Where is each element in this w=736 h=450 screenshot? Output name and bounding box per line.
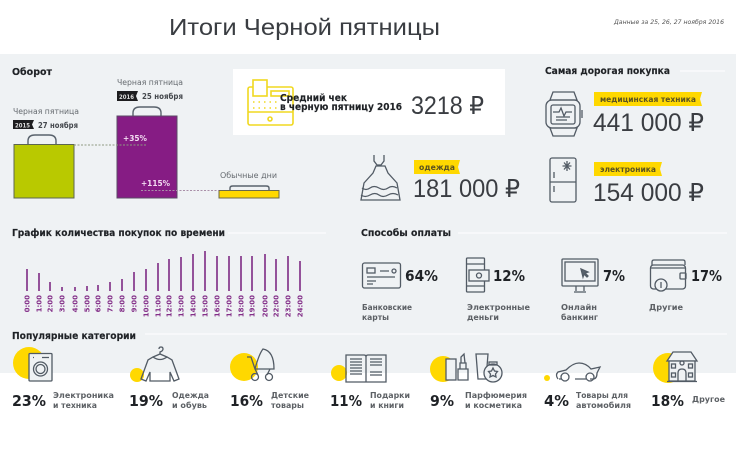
panel: most expensive purchase: 181 000 ₽ xyxy=(413,175,520,203)
icon: shirt on hanger xyxy=(141,347,179,381)
hour labels: 16:00 xyxy=(214,295,222,317)
panel: payment methods: 64% xyxy=(405,267,438,285)
hour labels: 2:00 xyxy=(46,295,54,312)
icon: stroller xyxy=(247,349,274,380)
tag: electronics xyxy=(594,162,662,176)
icon: smartwatch xyxy=(546,92,582,136)
panel: most expensive purchase xyxy=(361,66,704,207)
bars xyxy=(27,251,300,291)
category: perfume and cosmetics: Парфюмерия xyxy=(465,391,527,400)
panel: payment methods: Онлайн xyxy=(561,303,597,312)
hour labels: 4:00 xyxy=(72,295,80,312)
category: clothes and shoes: и обувь xyxy=(172,400,207,410)
category: children's goods: 16% xyxy=(230,392,263,410)
panel: payment methods: 17% xyxy=(691,267,722,285)
bag: 2015: 2015 xyxy=(15,122,30,130)
panel: turnover xyxy=(12,67,279,198)
icon: online banking monitor xyxy=(562,259,598,292)
category: children's goods xyxy=(230,349,310,410)
panel: payment methods: Другие xyxy=(649,303,684,312)
hour labels: 19:00 xyxy=(248,295,256,317)
tag: medical equipment xyxy=(594,92,702,106)
panel: payment methods: 7% xyxy=(603,267,625,285)
icon: cosmetics xyxy=(446,354,502,382)
hour labels: 10:00 xyxy=(142,295,150,317)
icon: e-money xyxy=(466,258,489,292)
category: gifts and books: 11% xyxy=(330,392,362,410)
bag: 2016 xyxy=(117,78,183,198)
hour labels: 23:00 xyxy=(284,295,292,317)
icon: cash register xyxy=(248,80,293,125)
heading: turnover: Оборот xyxy=(12,67,52,78)
hour labels: 9:00 xyxy=(130,295,138,312)
category: perfume and cosmetics: и косметика xyxy=(465,401,522,410)
bag: 2016: 2016 xyxy=(119,93,134,101)
category: car goods xyxy=(544,363,631,410)
category: gifts and books: Подарки xyxy=(370,391,410,400)
panel: average check: Средний чек xyxy=(280,93,348,104)
panel: payment methods: карты xyxy=(362,313,389,322)
panel: average check: 3218 ₽ xyxy=(411,92,484,120)
icon: bank card xyxy=(362,263,400,288)
hour labels xyxy=(24,295,304,317)
hour labels: 17:00 xyxy=(226,295,234,317)
hour labels: 6:00 xyxy=(94,295,102,312)
heading: chart: График количества покупок по времени xyxy=(12,228,225,239)
category: electronics and appliances: 23% xyxy=(12,392,46,410)
category: perfume and cosmetics: 9% xyxy=(430,392,454,410)
panel: most expensive purchase: 154 000 ₽ xyxy=(593,179,704,207)
category: clothes and shoes: 19% xyxy=(129,392,163,410)
hour labels: 12:00 xyxy=(166,295,174,317)
hour labels: 13:00 xyxy=(178,295,186,317)
category: car goods: 4% xyxy=(544,392,569,410)
title: Итоги Черной пятницы xyxy=(169,14,440,40)
icon: car xyxy=(556,363,600,381)
category: children's goods: товары xyxy=(271,401,304,410)
tag: clothes xyxy=(414,160,460,174)
category: electronics and appliances: и техника xyxy=(53,401,97,410)
bag: ordinary days xyxy=(219,171,279,198)
bag: 2015: Черная пятница xyxy=(13,107,79,116)
date note: Данные за 25, 26, 27 ноября 2016 xyxy=(613,19,724,26)
category: gifts and books: и книги xyxy=(370,401,404,410)
hour labels: 8:00 xyxy=(118,295,126,312)
category: clothes and shoes xyxy=(129,347,209,410)
hour labels: 3:00 xyxy=(58,295,66,312)
bag: 2016: 25 ноября xyxy=(142,92,183,101)
panel: most expensive purchase: медицинская техника xyxy=(600,95,696,104)
category: children's goods: Детские xyxy=(271,391,310,400)
icon: washing machine xyxy=(29,354,52,381)
icon: house xyxy=(667,352,697,382)
bag: 2015: 27 ноября xyxy=(38,121,78,130)
bag: 2016: +115% xyxy=(141,179,170,188)
category: other xyxy=(651,352,726,410)
bag: 2016: +35% xyxy=(123,134,147,143)
hour labels: 18:00 xyxy=(238,295,246,317)
heading: payment methods: Способы оплаты xyxy=(361,228,451,239)
hour labels: 20:00 xyxy=(262,295,270,317)
category: gifts and books xyxy=(330,355,410,410)
hour labels: 22:00 xyxy=(272,295,280,317)
bag: 2015 xyxy=(13,107,79,198)
panel: purchases by time chart xyxy=(12,228,304,317)
hour labels: 1:00 xyxy=(36,295,44,312)
heading: popular categories: Популярные категории xyxy=(12,331,136,342)
panel: payment methods: банкинг xyxy=(561,312,598,322)
bag: ordinary days: Обычные дни xyxy=(220,171,277,180)
hour labels: 14:00 xyxy=(190,295,198,317)
panel: payment methods: деньги xyxy=(467,313,499,322)
panel: payment methods: Электронные xyxy=(467,303,531,312)
panel: payment methods xyxy=(361,228,722,322)
icon: open book xyxy=(346,355,386,382)
hour labels: 5:00 xyxy=(84,295,92,312)
hour labels: 0:00 xyxy=(24,295,32,312)
panel: payment methods: 12% xyxy=(493,267,525,285)
bag: 2016: Черная пятница xyxy=(117,78,183,87)
panel: most expensive purchase: одежда xyxy=(419,163,455,172)
category: perfume and cosmetics xyxy=(430,354,527,410)
panel: most expensive purchase: электроника xyxy=(600,165,656,174)
category: clothes and shoes: Одежда xyxy=(172,391,209,400)
hour labels: 11:00 xyxy=(154,295,162,317)
icon: wallet xyxy=(650,260,686,291)
hour labels: 7:00 xyxy=(106,295,114,312)
category: other: 18% xyxy=(651,392,684,410)
panel: average check: в черную пятницу 2016 xyxy=(280,102,402,113)
category: electronics and appliances: Электроника xyxy=(53,391,114,400)
panel: payment methods: Банковские xyxy=(362,303,413,312)
category: other: Другое xyxy=(692,395,726,404)
icon: fridge xyxy=(550,158,576,202)
category: car goods: автомобиля xyxy=(576,400,631,410)
category: car goods: Товары для xyxy=(576,391,628,400)
panel: most expensive purchase: 441 000 ₽ xyxy=(593,109,704,137)
hour labels: 24:00 xyxy=(296,295,304,317)
hour labels: 15:00 xyxy=(202,295,210,317)
panel: popular categories xyxy=(12,331,726,410)
icon: dress xyxy=(361,155,400,200)
panel: average check xyxy=(233,69,505,135)
category: electronics and appliances xyxy=(12,347,114,410)
heading: most expensive purchase: Самая дорогая покупка xyxy=(545,66,670,77)
